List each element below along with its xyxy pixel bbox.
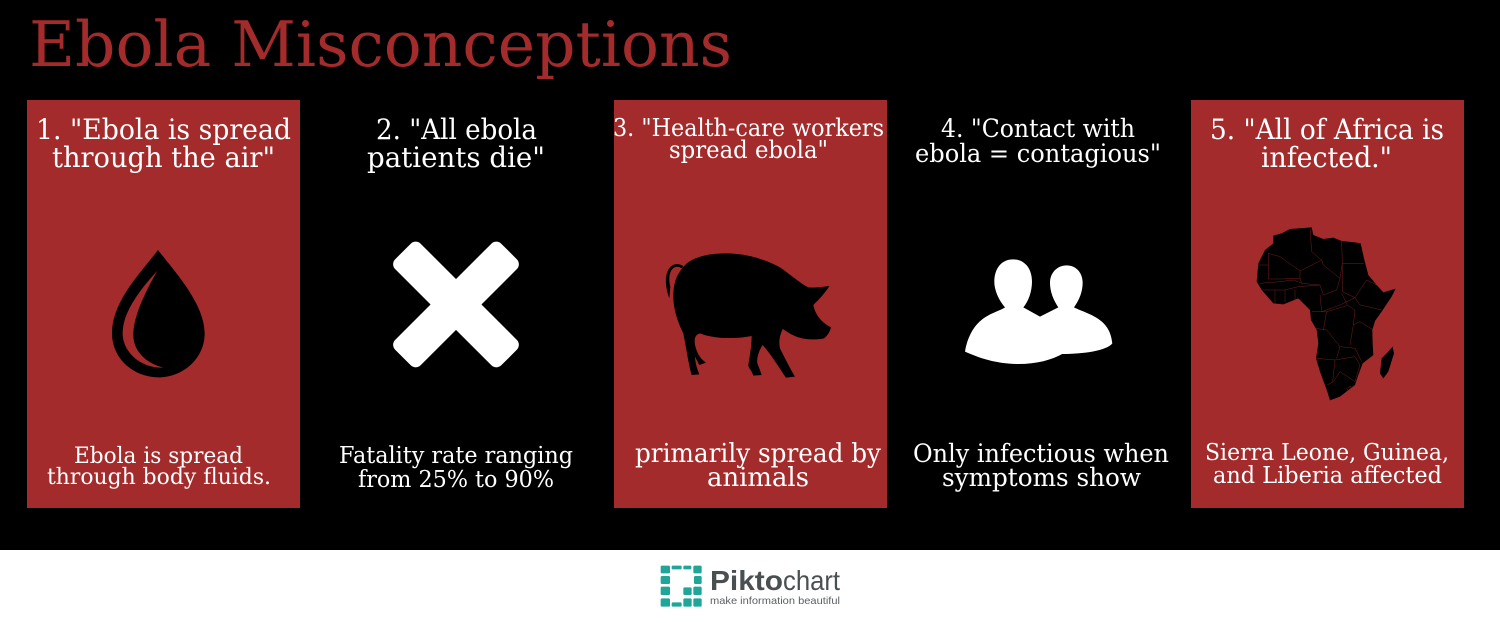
- text: fact 5: [1205, 438, 1449, 489]
- heading: misconception 3: [613, 114, 884, 164]
- panel: misconception 3: [613, 100, 887, 508]
- heading: misconception 1: through the air": [52, 141, 275, 174]
- text: fact 3: [635, 439, 881, 493]
- text: fact 4: [913, 439, 1169, 492]
- heading: misconception 1: 1. "Ebola is spread: [36, 113, 291, 146]
- text: fact 5: Sierra Leone, Guinea,: [1205, 438, 1449, 466]
- text: fact 4: symptoms show: [942, 463, 1142, 492]
- panel: misconception 4: [913, 114, 1169, 492]
- heading: misconception 5: 5. "All of Africa is: [1210, 113, 1444, 146]
- heading: misconception 5: infected.": [1261, 141, 1392, 174]
- text: fact 3: primarily spread by: [635, 439, 881, 469]
- text: tagline: make information beautiful: [710, 595, 840, 607]
- panel: misconception 5: [1191, 100, 1464, 508]
- text: fact 1: [47, 443, 271, 490]
- icon: map of Africa: [1257, 227, 1396, 400]
- text: Piktochart wordmark: Pikto: [710, 565, 783, 596]
- text: fact 1: through body fluids.: [47, 464, 271, 490]
- heading: misconception 4: ebola = contagious": [915, 139, 1161, 168]
- heading: misconception 2: [367, 113, 545, 174]
- text: fact 1: Ebola is spread: [74, 443, 243, 469]
- heading: misconception 1: [36, 113, 291, 174]
- heading: misconception 3: 3. "Health-care workers: [613, 114, 884, 142]
- heading: misconception 3: spread ebola": [669, 136, 828, 164]
- icon: cross: [350, 198, 562, 411]
- heading: misconception 2: patients die": [367, 141, 545, 174]
- heading: misconception 2: 2. "All ebola: [376, 113, 537, 146]
- text: fact 4: Only infectious when: [913, 439, 1169, 468]
- text: fact 3: animals: [707, 463, 809, 493]
- icon: blood drop: [112, 250, 205, 377]
- footer logo: Piktochart: [661, 565, 840, 607]
- heading: misconception 4: 4. "Contact with: [941, 114, 1135, 143]
- title: Ebola Misconceptions: [29, 8, 732, 81]
- text: fact 2: [339, 441, 573, 493]
- panel: misconception 2: [339, 113, 573, 493]
- heading: misconception 4: [915, 114, 1161, 168]
- icon: two people: [965, 259, 1112, 364]
- text: fact 2: Fatality rate ranging: [339, 441, 573, 469]
- icon: pig: [666, 253, 831, 378]
- icon: Piktochart mark: [661, 566, 702, 607]
- text: fact 2: from 25% to 90%: [358, 465, 554, 493]
- text: Piktochart wordmark: chart: [783, 565, 840, 596]
- text: fact 5: and Liberia affected: [1213, 461, 1442, 489]
- panel: misconception 1: [27, 100, 300, 508]
- heading: misconception 5: [1210, 113, 1444, 174]
